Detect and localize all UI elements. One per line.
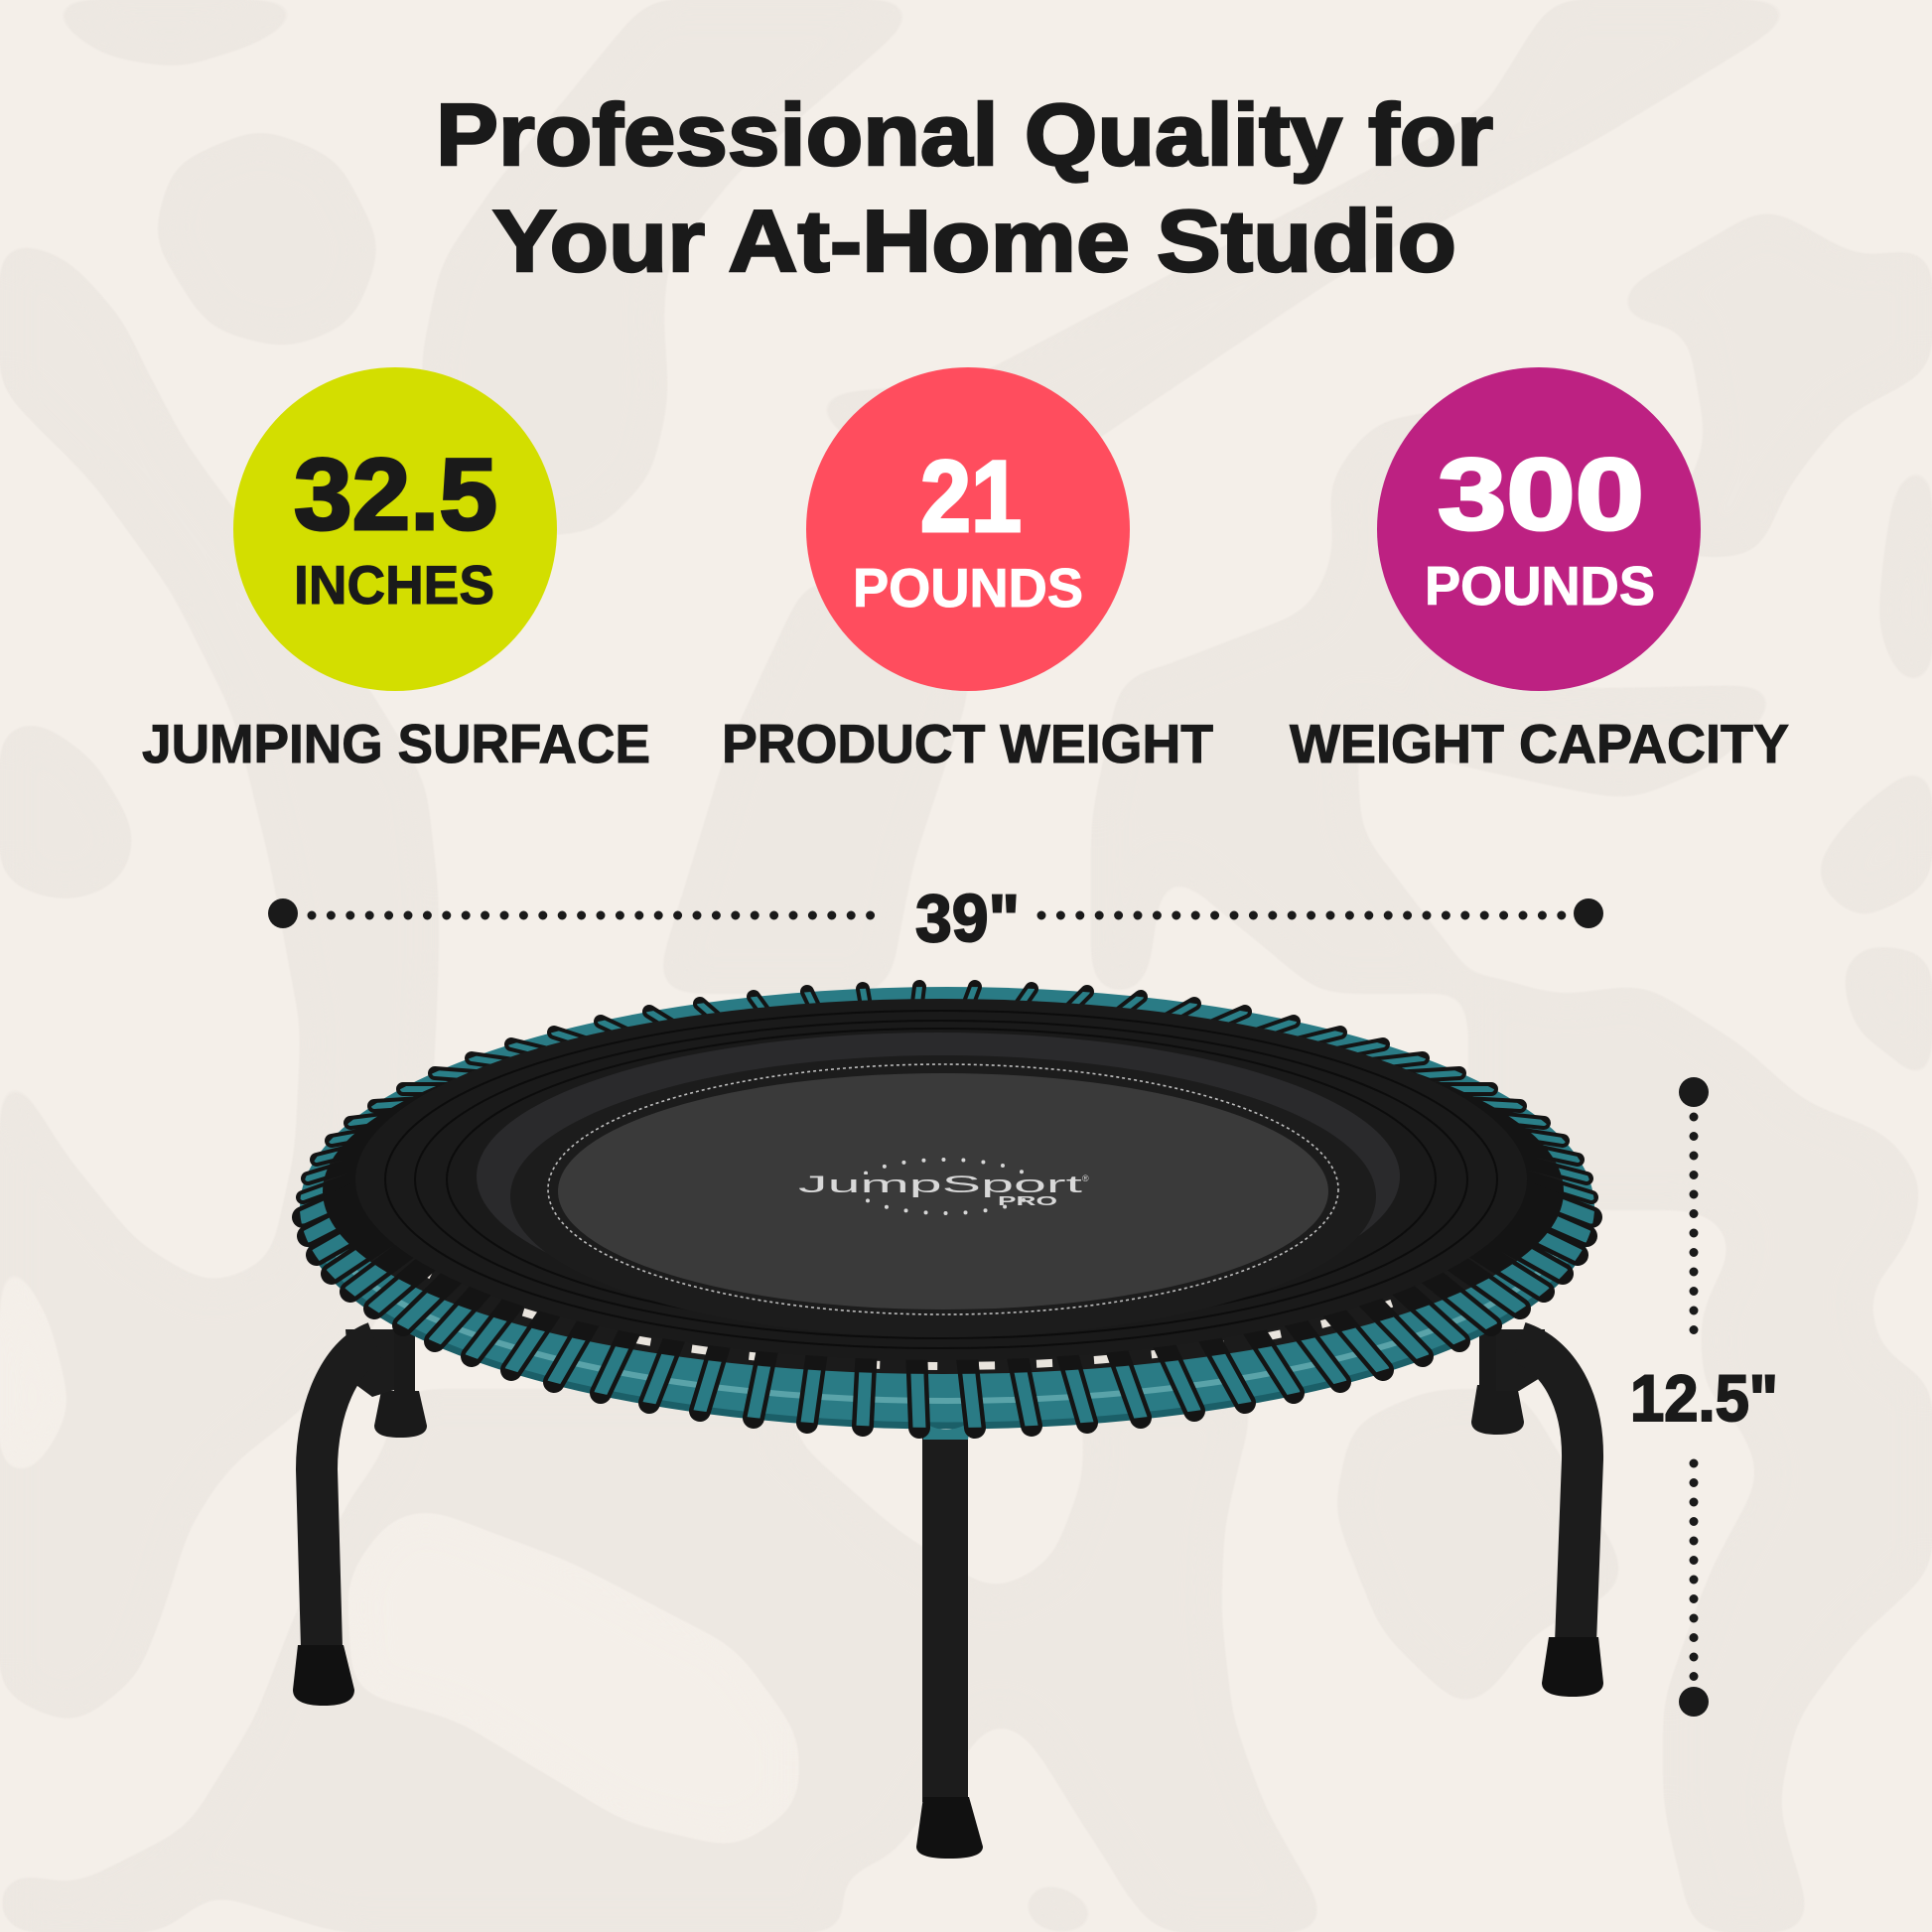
bungee springs bbox=[303, 987, 1591, 1428]
gap under the mat bbox=[323, 1009, 1564, 1374]
front right leg bbox=[1496, 1329, 1603, 1697]
front centre leg bbox=[916, 1430, 983, 1859]
stat: jumping surface: 32.5 bbox=[294, 438, 497, 551]
JumpSport logo: PRO bbox=[998, 1193, 1057, 1208]
stat: product weight: PRODUCT WEIGHT bbox=[722, 713, 1213, 774]
stat: product weight bbox=[722, 367, 1213, 774]
stat: product weight: POUNDS bbox=[853, 557, 1083, 619]
dimension: width 39 inches: 39" bbox=[915, 881, 1020, 956]
stat: jumping surface: INCHES bbox=[294, 554, 494, 616]
stat: weight capacity: WEIGHT CAPACITY bbox=[1290, 713, 1789, 774]
dimension: width 39 inches bbox=[268, 881, 1603, 956]
lighter shapes over the blobs bbox=[0, 1225, 798, 1848]
stat: weight capacity: POUNDS bbox=[1425, 555, 1655, 617]
dimension: height 12.5 inches bbox=[1630, 1077, 1778, 1717]
JumpSport logo: JumpSport bbox=[798, 1172, 1083, 1198]
stat: jumping surface bbox=[142, 367, 650, 774]
stat: jumping surface: JUMPING SURFACE bbox=[142, 713, 650, 774]
dimension: height 12.5 inches: 12.5" bbox=[1630, 1361, 1778, 1435]
title bbox=[436, 85, 1493, 290]
teal frame ring bbox=[300, 987, 1594, 1440]
back legs bbox=[374, 1330, 1524, 1438]
stat: weight capacity bbox=[1290, 367, 1789, 774]
title: Professional Quality for bbox=[436, 85, 1493, 184]
stat: product weight: 21 bbox=[920, 440, 1022, 553]
black mat bbox=[355, 999, 1527, 1360]
trampoline product bbox=[293, 987, 1603, 1859]
front left leg bbox=[293, 1329, 394, 1706]
JumpSport logo bbox=[794, 1160, 1089, 1213]
title: Your At-Home Studio bbox=[492, 192, 1456, 290]
stat: weight capacity: 300 bbox=[1438, 438, 1644, 551]
JumpSport logo: ® bbox=[1082, 1173, 1089, 1183]
